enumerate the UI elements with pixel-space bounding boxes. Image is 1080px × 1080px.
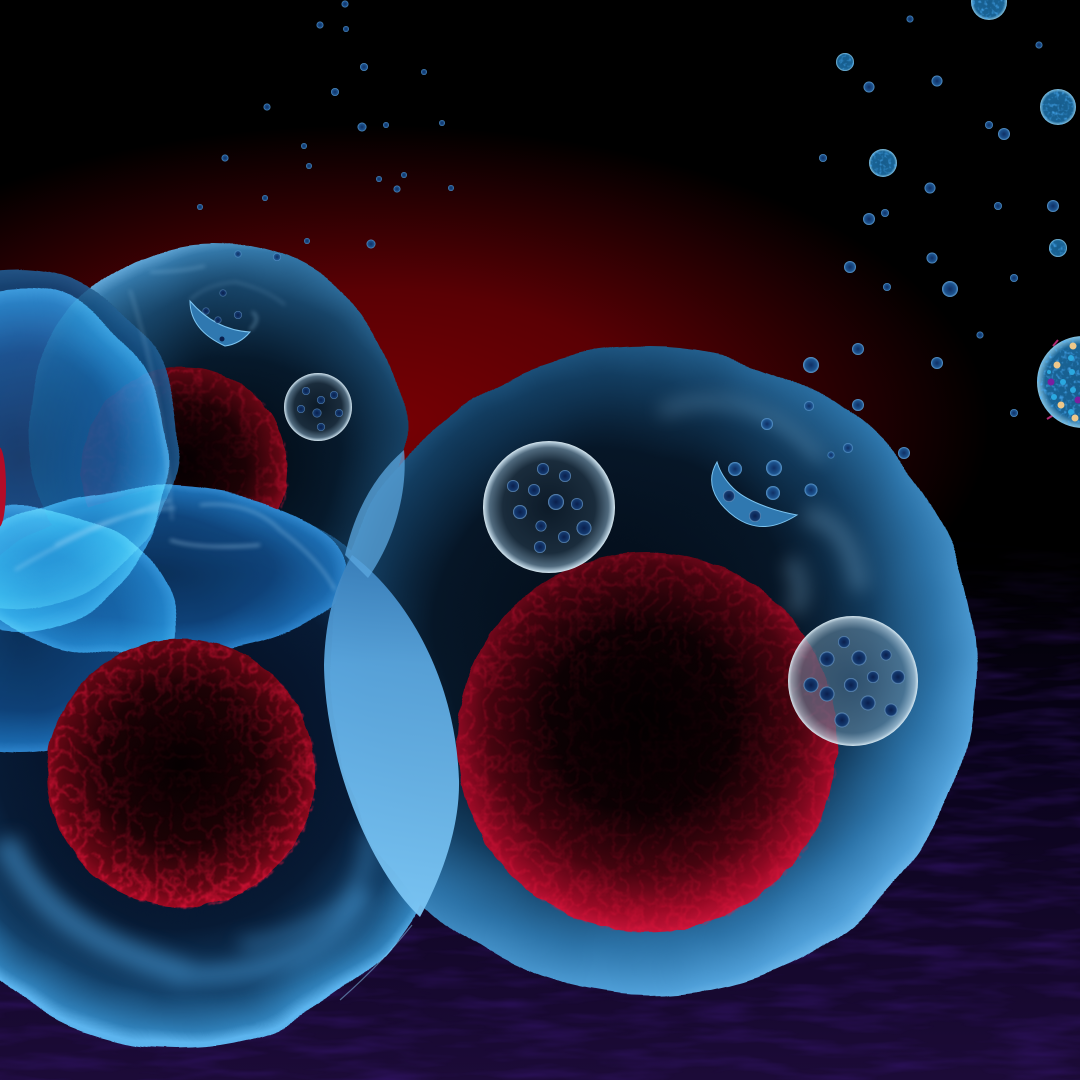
cell: left overlapping lobes: [0, 270, 345, 755]
vesicle pocket: large cell: [712, 460, 818, 527]
small vesicles: right cloud: [761, 16, 1059, 459]
lobe base: darkens what sits behind the lobes: [0, 270, 345, 755]
overlap lens between upper and right cells: [345, 450, 405, 578]
membrane folds: large cell: [660, 401, 860, 610]
membrane folds: lobes: [15, 290, 335, 590]
large vesicle with surface proteins: right edge: [1037, 336, 1080, 428]
nucleus: bottom left cell: [47, 639, 315, 907]
lobe: horizontal: [0, 488, 345, 656]
cell: upper: [26, 241, 404, 619]
vesicle pocket: upper cell: [190, 290, 250, 346]
vesicle: upper left of large cell: [483, 441, 615, 573]
membrane folds: bottom left cell: [5, 830, 370, 975]
floor: purple textured ground: [0, 540, 1080, 1080]
cell: bottom left: [0, 490, 456, 1046]
vesicle: upper cell: [284, 373, 352, 441]
membrane edge: bottom right of cell: [340, 925, 412, 1000]
lobe: upper behind: [0, 270, 180, 610]
vesicle: overlapping nucleus: [788, 616, 918, 746]
medium vesicles: right edge: [836, 0, 1076, 257]
nucleus sliver: far left: [0, 447, 6, 527]
lobe: lower left: [0, 505, 175, 755]
nucleus: large right cell: [457, 552, 837, 932]
nucleus: upper cell: [81, 367, 287, 573]
membrane folds: upper cell: [150, 266, 285, 330]
lobe: centre front: [0, 288, 168, 632]
overlap lens between bottom left and right cells: [324, 555, 459, 917]
cell: large right: [326, 347, 974, 995]
small vesicles: left cloud: [197, 0, 454, 261]
